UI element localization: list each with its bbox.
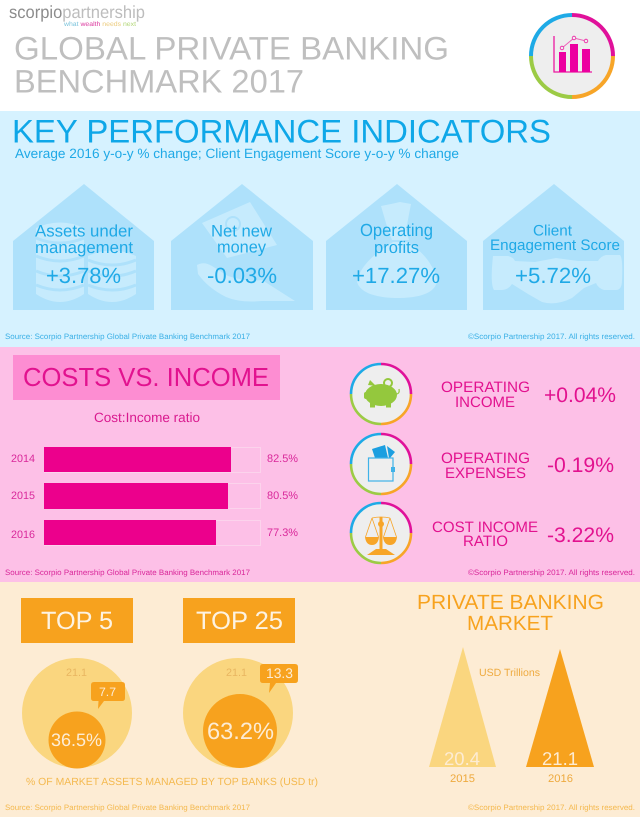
panel: assets under management: management	[35, 238, 133, 257]
panel: net new money: money	[217, 238, 267, 256]
copyright: costs: ©Scorpio Partnership 2017. All rights reserved.	[468, 568, 635, 577]
icon: coin stacks	[36, 222, 136, 302]
logo: scorpiopartnership: scorpiopartnership	[9, 2, 145, 22]
bar chart: cost income ratio: 2015	[11, 490, 35, 502]
bar chart: cost income ratio: 77.3%	[267, 527, 298, 539]
heading: top 5: TOP 5	[41, 607, 113, 635]
chart title: cost income ratio: Cost:Income ratio	[94, 410, 200, 425]
text: cost income ratio: COST INCOME	[432, 519, 538, 536]
text: operating expenses: OPERATING	[441, 450, 530, 467]
chart: top 5 share circles: 36.5%	[51, 730, 102, 750]
chart: top 25 share circles: 13.3	[266, 665, 293, 681]
chart: top 5 share circles: 21.1	[66, 667, 87, 679]
icon: bar chart badge	[531, 15, 613, 97]
chart: market size triangles: 2016	[548, 773, 573, 785]
logo: scorpiopartnership: what wealth needs next	[63, 21, 136, 28]
panel: operating profits: +17.27%	[352, 263, 440, 288]
chart: top 5 share circles: 7.7	[99, 685, 116, 699]
heading: top 25	[183, 598, 295, 643]
bar chart: cost income ratio: 80.5%	[267, 490, 298, 502]
heading: top 5	[21, 598, 133, 643]
heading: costs vs. income: COSTS VS. INCOME	[23, 362, 269, 392]
heading: key performance indicators: KEY PERFORMANCE INDICATORS	[12, 113, 551, 150]
text: cost income ratio	[432, 519, 538, 550]
value: operating expenses change: -0.19%	[547, 454, 614, 477]
chart: market size triangles	[429, 647, 594, 785]
panel: net new money	[171, 184, 313, 310]
chart: market size triangles: USD Trillions	[479, 667, 540, 679]
panel: operating profits: Operating	[360, 220, 433, 240]
bar chart: cost income ratio: 2014	[11, 453, 35, 465]
chart: market size triangles: 21.1	[542, 748, 578, 769]
text: operating expenses	[441, 450, 530, 482]
source: market: Source: Scorpio Partnership Global Private Banking Benchmark 2017	[5, 803, 250, 812]
chart: top 25 share circles: 21.1	[226, 667, 247, 679]
copyright: market: ©Scorpio Partnership 2017. All rights reserved.	[468, 803, 635, 812]
bar chart: cost income ratio: 2016	[11, 529, 35, 541]
copyright: KPI: ©Scorpio Partnership 2017. All rights reserved.	[468, 332, 635, 341]
heading: top 25: TOP 25	[196, 607, 283, 635]
heading: private banking market: MARKET	[467, 612, 553, 635]
icon: handshake	[492, 255, 622, 303]
title: BENCHMARK 2017	[14, 63, 304, 100]
icon: money bag	[357, 202, 437, 298]
panel: net new money: Net new	[211, 222, 273, 240]
heading: costs vs. income	[13, 355, 280, 400]
chart: market size triangles: 20.4	[444, 748, 480, 769]
panel: operating profits: profits	[374, 238, 419, 257]
text: operating expenses: EXPENSES	[445, 465, 526, 482]
panel: client engagement score: Engagement Score	[490, 237, 620, 254]
heading: private banking market	[417, 591, 604, 635]
chart: top 25 share circles: 63.2%	[207, 719, 274, 745]
panel: client engagement score	[483, 184, 624, 310]
text: operating income: INCOME	[455, 394, 515, 411]
panel: client engagement score: +5.72%	[515, 263, 591, 288]
icon: scales badge	[351, 503, 411, 563]
value: cost income ratio change: -3.22%	[547, 524, 614, 547]
subheading: KPI description: Average 2016 y-o-y % change; Client Engagement Score y-o-y % change	[15, 146, 459, 161]
icon: piggy bank badge	[351, 364, 411, 424]
panel: net new money: -0.03%	[207, 263, 277, 288]
panel: operating profits	[326, 184, 467, 310]
bar chart: cost income ratio	[11, 447, 298, 546]
panel: assets under management	[13, 184, 154, 310]
value: operating income change: +0.04%	[544, 384, 616, 407]
caption: market assets: % OF MARKET ASSETS MANAGED BY TOP BANKS (USD tr)	[26, 777, 318, 788]
panel: assets under management: +3.78%	[46, 263, 121, 288]
title	[14, 30, 449, 100]
text: operating income: OPERATING	[441, 379, 530, 396]
panel: client engagement score: Client	[533, 222, 573, 240]
icon: wallet badge	[351, 434, 411, 494]
chart: top 25 share circles	[183, 658, 298, 768]
chart: top 5 share circles	[22, 658, 132, 768]
chart: market size triangles: 2015	[450, 773, 475, 785]
title: GLOBAL PRIVATE BANKING	[14, 30, 449, 66]
icon: banknote over hand	[197, 202, 295, 302]
text: cost income ratio: RATIO	[463, 533, 508, 550]
source: KPI: Source: Scorpio Partnership Global Private Banking Benchmark 2017	[5, 332, 250, 341]
bar chart: cost income ratio: 82.5%	[267, 453, 298, 465]
source: costs: Source: Scorpio Partnership Global Private Banking Benchmark 2017	[5, 568, 250, 577]
heading: private banking market: PRIVATE BANKING	[417, 591, 604, 614]
panel: assets under management: Assets under	[35, 222, 133, 240]
text: operating income	[441, 379, 530, 411]
